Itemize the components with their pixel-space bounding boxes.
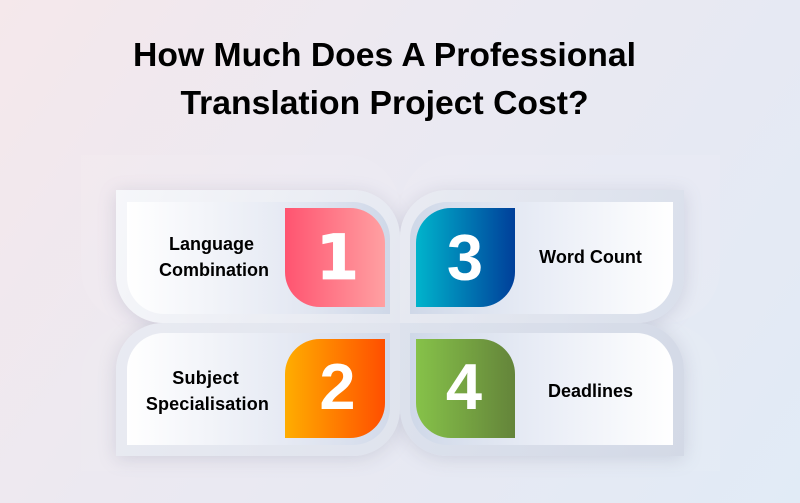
panel 1: language combination xyxy=(116,190,400,323)
number tile 4 xyxy=(416,339,515,438)
number tile 1: 1 xyxy=(316,221,359,294)
title: Translation Project Cost? xyxy=(180,84,589,122)
number tile 2: 2 xyxy=(319,350,356,423)
title xyxy=(133,36,636,122)
label 3: Word Count xyxy=(539,247,642,267)
label 4: Deadlines xyxy=(548,381,633,401)
panel 1 inner card xyxy=(127,202,390,314)
label 1: Language xyxy=(169,234,254,254)
label 1 xyxy=(159,234,269,280)
number tile 2 xyxy=(285,339,384,438)
label 2 xyxy=(146,368,269,414)
label 2: Specialisation xyxy=(146,394,269,414)
number tile 3 xyxy=(416,208,515,307)
panel 2 inner card xyxy=(127,333,390,445)
number tile 1 xyxy=(285,208,384,307)
panel 3: word count xyxy=(400,190,684,323)
panel 3 inner card xyxy=(410,202,673,314)
label 1: Combination xyxy=(159,260,269,280)
panel 4 inner card xyxy=(410,333,673,445)
number tile 4: 4 xyxy=(446,350,482,423)
number tile 3: 3 xyxy=(447,221,483,294)
label 2: Subject xyxy=(172,368,239,388)
title: How Much Does A Professional xyxy=(133,36,636,74)
panel 4: deadlines xyxy=(400,323,684,456)
backing panel xyxy=(81,155,720,471)
panel 2: subject specialisation xyxy=(116,323,400,456)
